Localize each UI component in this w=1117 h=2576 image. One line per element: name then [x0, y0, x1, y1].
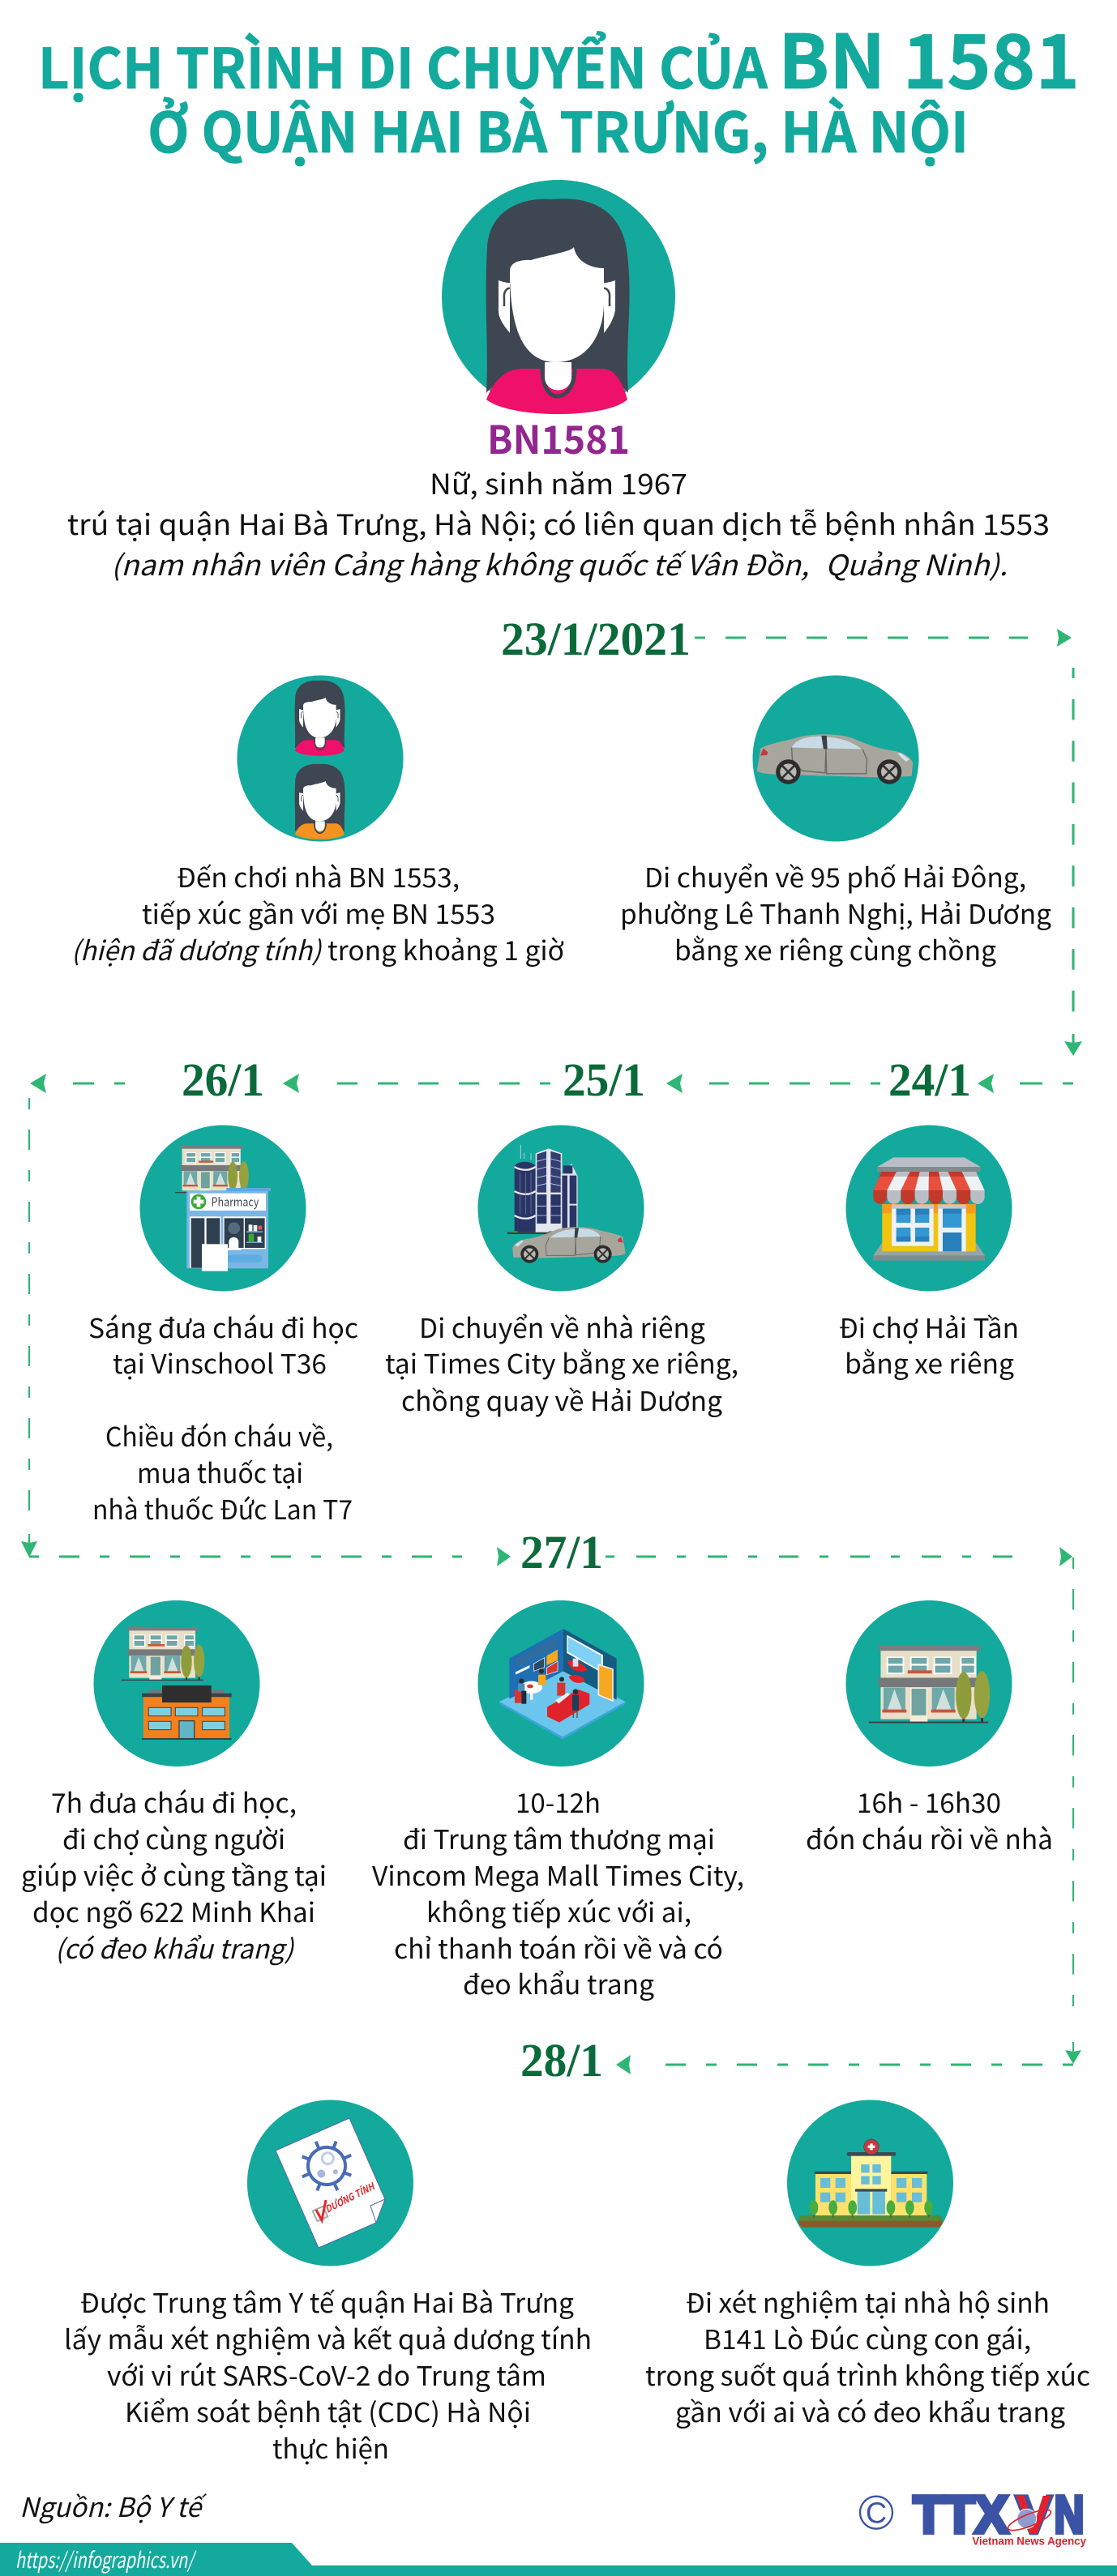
- panel: visit to patient 1553: Đến chơi nhà BN 1553,: [177, 857, 460, 895]
- title: LỊCH TRÌNH DI CHUYỂN CỦA: [38, 24, 768, 105]
- panel: shopping mall, 27/1 noon: chỉ thanh toán rồi về và có: [394, 1928, 723, 1967]
- date: 26/1: 26/1: [182, 1053, 264, 1106]
- panel: car back to Hai Duong: Di chuyển về 95 phố Hải Đông,: [644, 857, 1026, 895]
- panel: shopping mall, 27/1 noon: không tiếp xúc với ai,: [426, 1891, 691, 1930]
- logo: TTXVN Vietnam News Agency: [860, 2485, 1086, 2548]
- panel: houses, market 27/1 morning: đi chợ cùng người: [62, 1818, 285, 1857]
- panel: houses, market 27/1 morning: giúp việc ở cùng tầng tại: [21, 1855, 327, 1894]
- date: 24/1: 24/1: [888, 1053, 971, 1106]
- panel: houses, market 27/1 morning: dọc ngõ 622 Minh Khai: [32, 1891, 315, 1930]
- panel: shopping mall, 27/1 noon: 10-12h: [516, 1782, 601, 1821]
- date: 23/1/2021: 23/1/2021: [501, 613, 691, 665]
- panel: shopping mall, 27/1 noon: đeo khẩu trang: [463, 1963, 654, 2002]
- panel: hospital, 28/1: gần với ai và có đeo khẩu trang: [675, 2391, 1065, 2430]
- panel: pharmacy, 26/1: nhà thuốc Đức Lan T7: [92, 1489, 353, 1527]
- panel: pharmacy, 26/1: Pharmacy: [212, 1193, 259, 1210]
- title: Ở QUẬN HAI BÀ TRƯNG, HÀ NỘI: [148, 88, 969, 169]
- panel: positive test result, 28/1: lấy mẫu xét nghiệm và kết quả dương tính: [64, 2318, 592, 2357]
- title: BN 1581: [778, 2, 1080, 110]
- panel: market stall, 24/1: bằng xe riêng: [845, 1343, 1014, 1382]
- panel: positive test result, 28/1: [64, 2100, 592, 2467]
- panel: positive test result, 28/1: DƯƠNG TÍNH: [323, 2179, 378, 2216]
- panel: Times City towers and car, 25/1: chồng quay về Hải Dương: [401, 1380, 722, 1419]
- date: 27/1: 27/1: [520, 1526, 603, 1578]
- panel: pharmacy, 26/1: Sáng đưa cháu đi học: [88, 1307, 358, 1346]
- panel: house, 27/1 afternoon: 16h - 16h30: [857, 1782, 1001, 1821]
- source note: Nguồn: Bộ Y tế: [19, 2486, 208, 2525]
- patient label and description: [67, 408, 1050, 584]
- panel: positive test result, 28/1: thực hiện: [272, 2428, 389, 2467]
- panel: hospital, 28/1: [645, 2100, 1090, 2430]
- panel: hospital, 28/1: trong suốt quá trình không tiếp xúc: [645, 2355, 1090, 2394]
- panel: hospital, 28/1: Đi xét nghiệm tại nhà hộ sinh: [686, 2282, 1050, 2321]
- logo: TTXVN Vietnam News Agency: N: [1055, 2485, 1084, 2544]
- panel: car back to Hai Duong: phường Lê Thanh Nghị, Hải Dương: [620, 893, 1051, 932]
- panel: house, 27/1 afternoon: đón cháu rồi về nhà: [806, 1818, 1053, 1857]
- panel: pharmacy, 26/1: mua thuốc tại: [137, 1452, 303, 1491]
- footer bar: [0, 2543, 1117, 2576]
- panel: shopping mall, 27/1 noon: Vincom Mega Mall Times City,: [372, 1855, 744, 1894]
- panel: market stall, 24/1: [839, 1125, 1019, 1382]
- panel: patient avatar: [442, 180, 675, 414]
- title: [38, 2, 1080, 169]
- logo: TTXVN Vietnam News Agency: C: [866, 2496, 887, 2529]
- panel: pharmacy, 26/1: tại Vinschool T36: [113, 1343, 327, 1382]
- patient label and description: (nam nhân viên Cảng hàng không quốc tế Vân Đồn,: [111, 543, 809, 584]
- panel: Times City towers and car, 25/1: Di chuyển về nhà riêng: [419, 1307, 705, 1346]
- panel: visit to patient 1553: trong khoảng 1 giờ: [327, 929, 564, 968]
- date: 25/1: 25/1: [563, 1053, 645, 1106]
- panel: shopping mall, 27/1 noon: [372, 1600, 744, 2002]
- logo: TTXVN Vietnam News Agency: TTX: [914, 2485, 1008, 2544]
- panel: market stall, 24/1: Đi chợ Hải Tần: [839, 1307, 1019, 1346]
- patient label and description: trú tại quận Hai Bà Trưng, Hà Nội; có liên quan dịch tễ bệnh nhân 1553: [67, 502, 1050, 544]
- panel: hospital, 28/1: B141 Lò Đúc cùng con gái,: [704, 2318, 1031, 2357]
- patient label and description: Quảng Ninh).: [825, 543, 1008, 584]
- panel: houses, market 27/1 morning: 7h đưa cháu đi học,: [51, 1782, 297, 1821]
- panel: positive test result, 28/1: Được Trung tâm Y tế quận Hai Bà Trưng: [80, 2282, 574, 2321]
- panel: positive test result, 28/1: Kiểm soát bệnh tật (CDC) Hà Nội: [125, 2391, 531, 2430]
- panel: visit to patient 1553: (hiện đã dương tính): [71, 929, 323, 968]
- panel: Times City towers and car, 25/1: [385, 1125, 738, 1419]
- date: 28/1: 28/1: [520, 2034, 603, 2087]
- panel: house, 27/1 afternoon: [806, 1600, 1053, 1857]
- logo: TTXVN Vietnam News Agency: V: [1016, 2485, 1051, 2545]
- panel: positive test result, 28/1: với vi rút SARS-CoV-2 do Trung tâm: [107, 2355, 546, 2394]
- logo: TTXVN Vietnam News Agency: Vietnam News Agency: [972, 2535, 1086, 2548]
- panel: car back to Hai Duong: [620, 676, 1051, 968]
- panel: houses, market 27/1 morning: (có đeo khẩu trang): [55, 1928, 295, 1967]
- panel: visit to patient 1553: tiếp xúc gần với mẹ BN 1553: [142, 893, 495, 932]
- patient label and description: Nữ, sinh năm 1967: [430, 462, 687, 503]
- patient label and description: BN1581: [487, 408, 630, 465]
- panel: shopping mall, 27/1 noon: đi Trung tâm thương mại: [403, 1818, 715, 1857]
- panel: visit to patient 1553: [71, 676, 564, 968]
- timeline dashed connector with arrows: [21, 629, 1082, 2074]
- panel: Times City towers and car, 25/1: tại Times City bằng xe riêng,: [385, 1343, 738, 1382]
- panel: pharmacy, 26/1: Chiều đón cháu về,: [105, 1416, 333, 1455]
- footer bar: https://infographics.vn/: [15, 2543, 197, 2574]
- panel: houses, market 27/1 morning: [21, 1600, 327, 1967]
- panel: car back to Hai Duong: bằng xe riêng cùng chồng: [674, 929, 996, 968]
- panel: pharmacy, 26/1: [88, 1125, 358, 1527]
